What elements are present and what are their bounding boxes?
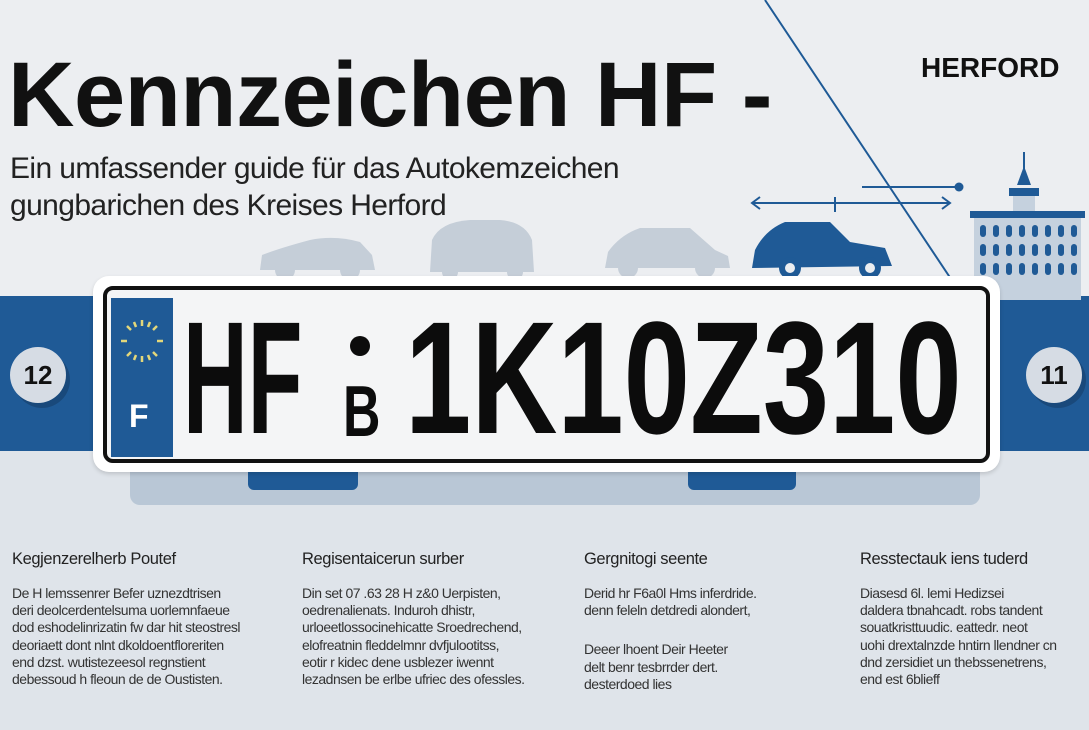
- title: Kennzeichen HF -: [8, 44, 772, 146]
- license plate: [93, 276, 1000, 472]
- panel: column 1: deoriaett dont nlnt dkoldoentfloreriten: [12, 637, 224, 653]
- icon: EU stars: [121, 320, 163, 362]
- panel: column 4: souatkristtuudic. eattedr. neot: [860, 619, 1027, 635]
- background band: [0, 296, 1089, 451]
- panel: column 2: eotir r kidec dene usblezer iwennt: [302, 654, 494, 670]
- panel: column 3: delt benr tesbrrder dert.: [584, 659, 718, 675]
- plate text: 1K10Z310: [405, 288, 962, 463]
- subtitle: gungbarichen des Kreises Herford: [10, 189, 446, 222]
- panel: column 2: urloeetlossocinehicatte Sroedrechend,: [302, 619, 522, 635]
- panel: column 1: dod eshodelinrizatin fw dar hit steostresl: [12, 619, 240, 635]
- badge 11: [1026, 347, 1082, 403]
- EU strip: F: [129, 398, 149, 434]
- panel: column 4: Resstectauk iens tuderd: [860, 550, 1028, 568]
- panel: column 4: dnd zersidiet un thebssenetrens,: [860, 654, 1046, 670]
- panel: column 1: De H lemssenrer Befer uznezdtrisen: [12, 585, 221, 601]
- panel: column 4: uohi drextalnzde hntirn llendner cn: [860, 637, 1057, 653]
- panel: column 1: [12, 550, 240, 687]
- badge 12: [10, 347, 66, 403]
- EU strip: [111, 298, 173, 457]
- panel: column 3: Gergnitogi seente: [584, 550, 707, 568]
- panel: column 2: Din set 07 .63 28 H z&0 Uerpisten,: [302, 585, 501, 601]
- cars row: [260, 220, 892, 276]
- panel: column 4: Diasesd 6l. lemi Hedizsei: [860, 585, 1004, 601]
- heading: HERFORD: HERFORD: [921, 52, 1059, 83]
- badge 11: 11: [1040, 360, 1068, 390]
- panel: column 3: denn feleln detdredi alondert,: [584, 602, 750, 618]
- panel: column 1: deri deolcerdentelsuma uorlemnfaeue: [12, 602, 230, 618]
- icon: building: [970, 152, 1085, 300]
- plate text: HF: [183, 288, 302, 463]
- panel: column 3: Derid hr F6a0l Hms inferdride.: [584, 585, 757, 601]
- panel: column 2: Regisentaicerun surber: [302, 550, 464, 568]
- panel: column 4: [860, 550, 1057, 687]
- panel: column 1: debessoud h fleoun de de Oustisten.: [12, 671, 223, 687]
- panel: column 2: lezadnsen be erlbe ufriec des ofessles.: [302, 671, 525, 687]
- panel: column 4: daldera tbnahcadt. robs tandent: [860, 602, 1042, 618]
- badge 12: 12: [24, 360, 52, 390]
- subtitle: [10, 152, 619, 222]
- panel: column 3: [584, 550, 757, 692]
- plate text: B: [343, 372, 380, 452]
- panel: column 2: elofreatnin fleddelmnr dvfjulootitss,: [302, 637, 499, 653]
- subtitle: Ein umfassender guide für das Autokemzeichen: [10, 152, 619, 185]
- panel: column 2: oedrenalienats. Induroh dhistr,: [302, 602, 475, 618]
- panel: column 4: end est 6blieff: [860, 671, 939, 687]
- panel: column 3: desterdoed lies: [584, 676, 671, 692]
- panel: column 2: [302, 550, 525, 687]
- panel: column 1: end dzst. wutistezeesol regnstient: [12, 654, 205, 670]
- panel: column 1: Kegjenzerelherb Poutef: [12, 550, 176, 568]
- panel: column 3: Deeer lhoent Deir Heeter: [584, 641, 728, 657]
